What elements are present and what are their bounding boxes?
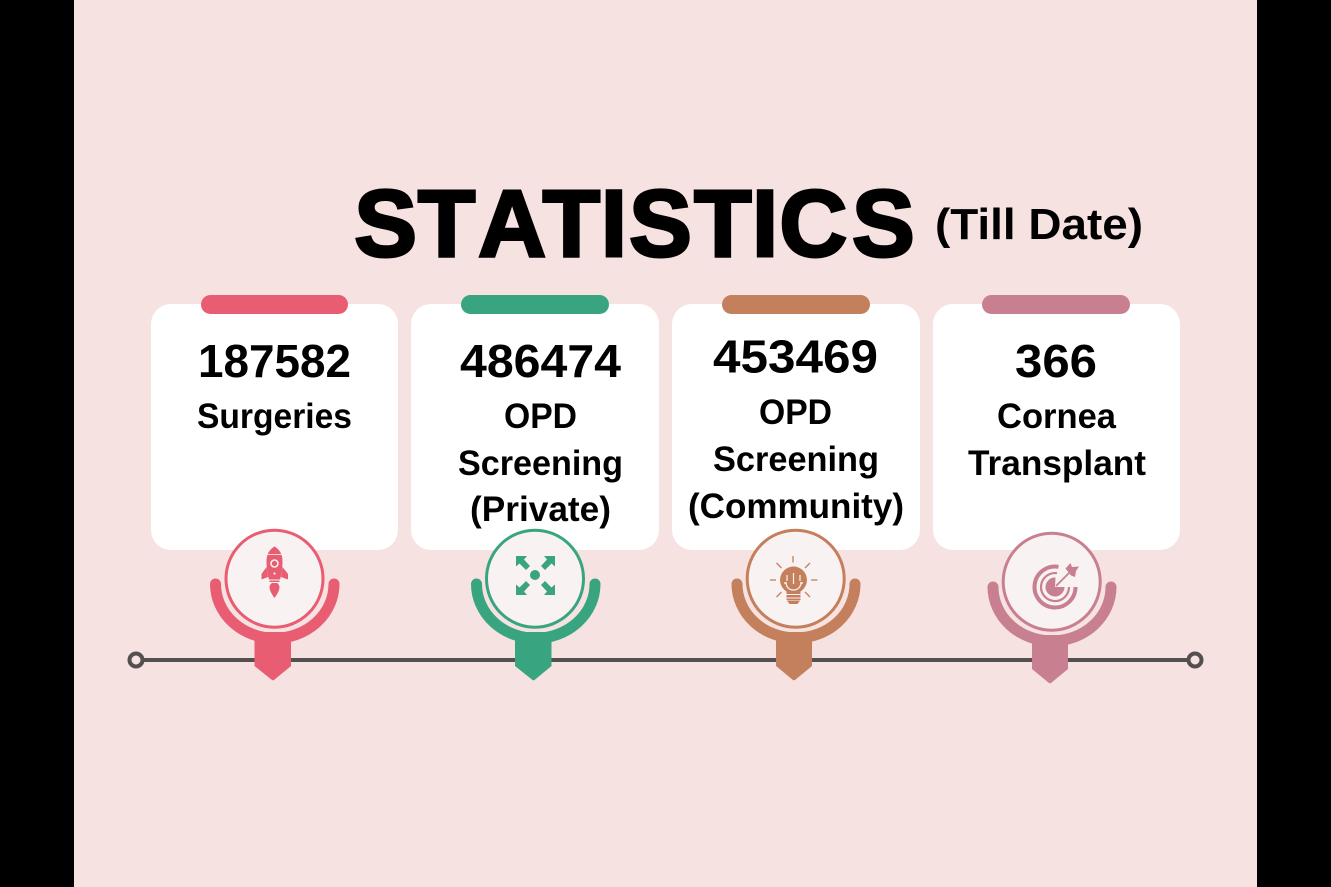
tab [461,295,609,314]
tab [982,295,1130,314]
number: 486474 [460,335,621,387]
pendant: pink with target [993,533,1111,683]
label: Surgeries [197,397,352,436]
label: Screening [458,444,623,483]
label: OPD [504,397,577,436]
panel: surgeries [151,295,398,550]
title: STATISTICS [354,171,915,277]
panel: cornea transplant [933,295,1180,550]
icon: lightbulb [770,556,818,604]
icon: target [1034,563,1079,607]
timeline [130,654,1202,666]
card [411,304,659,550]
label: OPD [759,393,832,432]
number: 366 [1015,335,1097,387]
number: 187582 [198,335,351,387]
label: (Private) [470,490,611,529]
card [933,304,1180,550]
label: Cornea [997,397,1117,436]
icon: rocket [262,546,288,598]
subtitle: till date: (Till Date) [935,200,1143,249]
panel: opd screening private [411,295,659,550]
pendant: orange with lightbulb [737,530,855,680]
label: Transplant [968,444,1146,483]
label: Screening [713,440,879,479]
card [672,304,920,550]
number: 453469 [713,330,878,382]
pendant: red with rocket [216,530,334,680]
tab [201,295,348,314]
panel: opd screening community [672,295,920,550]
icon: expand arrows [516,556,555,595]
card [151,304,398,550]
pendant: green with arrows [476,530,595,680]
tab [722,295,870,314]
label: (Community) [688,487,904,526]
